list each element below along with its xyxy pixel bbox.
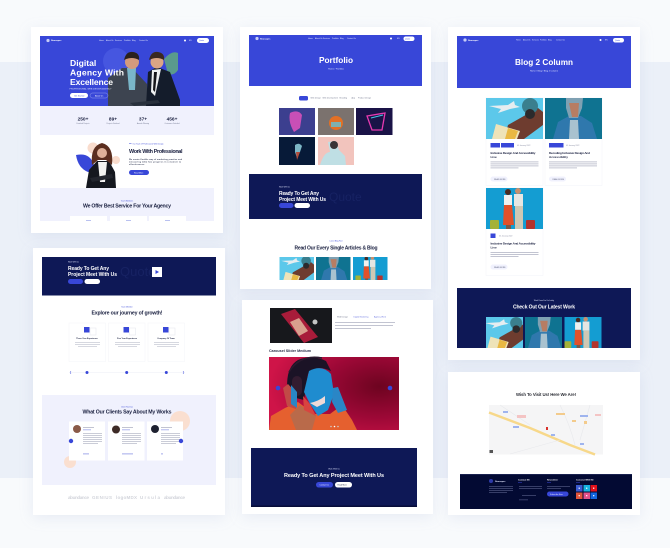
navigation bar: About Us <box>106 39 113 42</box>
section: work with professional: Our Team Of Professional Web Design <box>132 144 163 146</box>
hero heading: Excellence <box>70 77 113 87</box>
blog card 2: 05 January 2022 <box>566 145 579 147</box>
hero buttons <box>70 93 108 98</box>
face <box>304 368 334 416</box>
footer brand <box>489 479 513 493</box>
call to action banner: Work With Us <box>328 468 340 470</box>
partner logos: logoMDX <box>116 495 137 500</box>
blog heading <box>294 240 378 252</box>
article text: Digital Marketing <box>354 316 368 318</box>
statistics band: 89+ <box>109 116 117 122</box>
panel: portfolio page <box>240 27 431 289</box>
blog card 1: READ MORE <box>494 178 506 181</box>
portfolio filter tabs: Branding <box>340 96 347 100</box>
blog heading: Read Our Every Single Articles & Blog <box>294 246 378 252</box>
panel: agency home page <box>31 27 223 233</box>
partner logos: abundance <box>68 495 89 500</box>
section: work with professional: effectiveness. <box>129 163 145 166</box>
panel: blog page <box>448 27 640 360</box>
partner logos: Ursula <box>140 495 160 500</box>
article text <box>335 316 395 329</box>
journey heading: Team Member <box>121 306 133 308</box>
blog heading: Latest Blog Post <box>329 240 343 242</box>
partner logos: abundance <box>164 495 185 500</box>
jacket <box>269 402 357 430</box>
partner logos <box>68 495 185 500</box>
navigation bar: Home <box>308 38 313 40</box>
blog card 3 <box>486 188 543 276</box>
navigation bar: EN <box>605 40 608 42</box>
blog card 1 <box>486 98 543 186</box>
blog card 1: Inclusive Design And Accessibility <box>490 151 536 155</box>
navigation bar: About Us <box>523 38 530 42</box>
hero heading: Digital <box>70 58 96 68</box>
footer <box>460 474 632 509</box>
call to action banner: Project Meet With Us <box>68 272 117 278</box>
blog card 2: Decoding Inclusive Design And <box>549 151 590 155</box>
statistics band: 37+ <box>139 116 147 122</box>
navigation bar: Services <box>323 38 330 40</box>
portfolio hero: Portfolio <box>319 55 353 65</box>
journey cards <box>69 323 184 362</box>
icon: play button <box>152 267 162 277</box>
navigation bar: Portfolio <box>124 39 131 42</box>
article text: Web Design <box>337 316 348 318</box>
blog card 3: Live <box>490 246 497 250</box>
call to action banner: Work With Us <box>68 260 79 264</box>
portfolio filter tabs: Web Design <box>310 98 321 100</box>
blog hero <box>457 36 631 88</box>
hero heading <box>70 58 124 87</box>
navigation bar: Home <box>516 40 521 42</box>
partner logos: GENIUS <box>92 495 112 500</box>
section: work with professional: measuring what has progress in a manner to <box>129 160 182 164</box>
navigation bar: Services <box>532 40 539 42</box>
blog card 2: READ MORE <box>552 178 565 181</box>
testimonials section <box>42 395 216 485</box>
portfolio hero: Home / Portfolio <box>328 68 345 70</box>
timeline <box>70 371 184 374</box>
navigation bar: Home <box>99 40 104 42</box>
navigation bar: Blog <box>548 40 552 42</box>
navigation bar: Contact Us <box>347 37 356 40</box>
map heading: Wish To Visit Us! Here We Are! <box>516 392 577 397</box>
illustration: professional woman <box>76 142 120 188</box>
footer brand: Starcapes <box>495 480 506 483</box>
carousel slide: woman with headphones <box>269 357 399 430</box>
testimonials section: What Our Clients Say About My Works <box>82 410 172 416</box>
latest work section: Work Done For Us Lately <box>534 299 554 302</box>
footer newsletter: Subscribe Now <box>550 493 563 496</box>
testimonials section: Client Reviews <box>121 406 133 408</box>
journey cards: Company Of Team <box>157 338 175 340</box>
statistics band: Finished Projects <box>77 122 90 125</box>
statistics band: Customers Satisfied <box>164 122 180 125</box>
section: work with professional: We create flexible way of marketing practice and <box>129 158 183 161</box>
blog card 3: Inclusive Design And Accessibility <box>490 242 536 246</box>
section: work with professional: Read More <box>134 172 143 174</box>
section: work with professional: Work With Professional <box>129 149 183 155</box>
blog card 1: 05 January 2022 <box>517 145 530 147</box>
call to action banner <box>251 448 417 507</box>
footer contact: Contact Me <box>518 478 531 482</box>
navigation bar: Starcapes <box>51 39 62 42</box>
navigation bar: Blog <box>132 40 136 42</box>
navigation bar: Contact Us <box>556 38 565 42</box>
call to action banner: Quote <box>329 190 362 204</box>
section: services: We Offer Best Service For Your Agency <box>83 204 171 210</box>
call to action banner <box>42 257 216 296</box>
navigation bar: Quote <box>199 39 204 42</box>
neck <box>303 396 316 416</box>
section: services: Team Members <box>121 200 133 202</box>
blog image row <box>280 256 388 281</box>
navigation bar: About Us <box>315 37 322 40</box>
map <box>489 405 603 454</box>
blog card 2 <box>545 98 602 186</box>
navigation bar <box>463 38 624 42</box>
call to action banner: Quote <box>120 264 155 279</box>
blog card 1: Live <box>490 155 497 159</box>
hands <box>283 384 297 409</box>
hair and headphones <box>287 357 331 400</box>
portfolio filter tabs <box>299 96 371 100</box>
footer social follow: Connect With Me <box>576 478 595 482</box>
journey cards: Three Year Experience <box>76 338 99 340</box>
call to action banner: Contact Us <box>320 484 329 486</box>
illustration: two businessmen <box>103 48 180 106</box>
carousel heading: Carousel Slider Medium <box>269 349 312 353</box>
footer social follow <box>576 478 597 499</box>
blog card 3: READ MORE <box>494 266 506 269</box>
panel: journey and testimonials page <box>33 248 225 515</box>
footer newsletter <box>547 478 570 496</box>
navigation bar: Services <box>115 40 122 42</box>
portfolio filter tabs: Product Design <box>358 96 371 100</box>
statistics band: 250+ <box>78 116 89 122</box>
journey heading: Explore our journey of growth! <box>92 310 163 316</box>
latest work section <box>457 288 631 348</box>
navigation bar: Quote <box>615 39 620 42</box>
navigation bar: Portfolio <box>540 38 547 42</box>
call to action banner: Ready To Get Any <box>68 266 109 272</box>
navigation bar <box>46 38 209 43</box>
footer newsletter: Newsletter <box>547 478 558 482</box>
navigation bar: Blog <box>340 38 344 40</box>
hero banner <box>40 36 214 106</box>
navigation bar: Starcapes <box>468 39 479 42</box>
navigation bar: Starcapes <box>260 37 271 40</box>
navigation bar: EN <box>189 40 192 42</box>
footer contact <box>518 478 542 500</box>
statistics band: 456+ <box>167 116 178 122</box>
portfolio hero <box>249 35 422 86</box>
hero buttons: About Us <box>95 94 103 98</box>
call to action banner: Ready To Get Any <box>279 191 319 197</box>
blog card 3: 05 January 2022 <box>499 236 512 238</box>
portfolio filter tabs: App <box>352 96 355 100</box>
blog card 2: Accessibility <box>549 155 568 159</box>
article text: Agency Work <box>374 316 386 318</box>
call to action banner: Ready To Get Any Project Meet With Us <box>284 473 384 479</box>
navigation bar: Contact Us <box>139 39 148 42</box>
panel: carousel page <box>242 300 433 514</box>
latest work section: Check Out Our Latest Work <box>513 304 575 310</box>
statistics band <box>40 106 214 135</box>
hero buttons: Get Started <box>74 94 84 98</box>
navigation bar: Portfolio <box>332 37 339 40</box>
statistics band: Projects Finished <box>107 122 120 125</box>
portfolio filter tabs: Web Development <box>322 96 338 100</box>
section: work with professional <box>129 143 183 175</box>
call to action banner: Read More <box>338 484 347 486</box>
phone photo <box>270 308 332 343</box>
navigation bar: EN <box>397 38 400 40</box>
journey cards: Five Year Experience <box>117 338 138 340</box>
call to action banner: Project Meet With Us <box>279 197 326 203</box>
section: services <box>40 188 214 221</box>
carousel arrows <box>276 386 280 390</box>
blog hero: Home / Blog / Blog 2 Column <box>530 70 559 72</box>
journey heading <box>92 306 163 316</box>
call to action banner: Work With Us <box>279 186 290 188</box>
hero subtitle: PROFESSIONAL WEB DESIGN AGENCY <box>70 88 112 90</box>
portfolio image grid <box>279 108 392 165</box>
navigation bar <box>255 36 414 41</box>
hero heading: Agency With <box>70 68 124 78</box>
call to action banner <box>249 174 422 219</box>
blog hero: Blog 2 Column <box>515 58 573 67</box>
panel: contact page <box>448 372 640 515</box>
statistics band: Awards Winning <box>137 122 149 125</box>
navigation bar: Quote <box>405 38 410 40</box>
